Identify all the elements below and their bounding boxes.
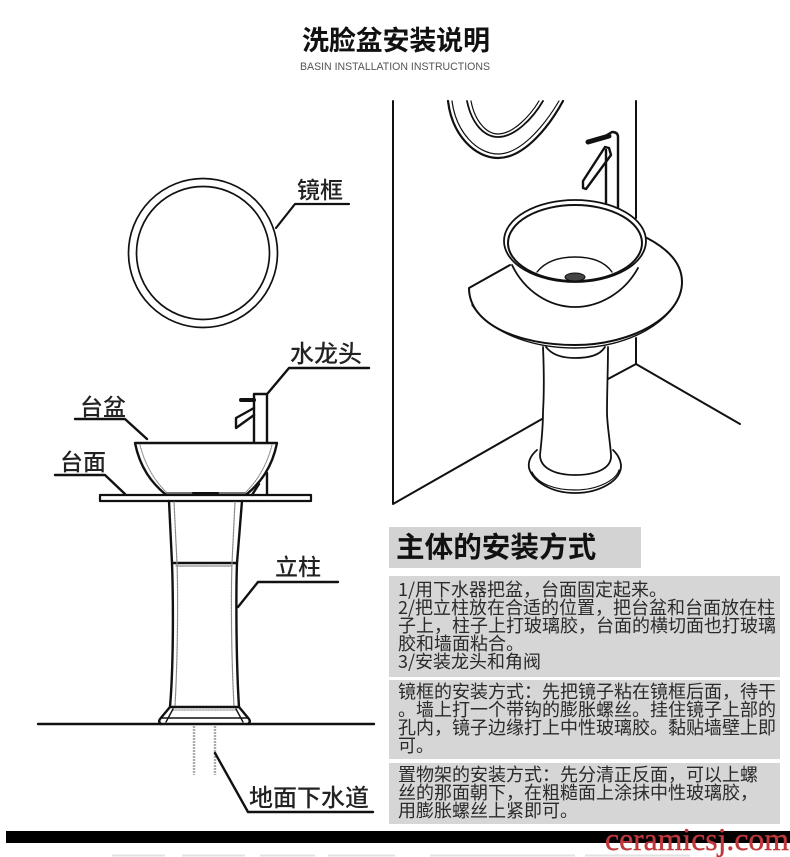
panel: mirror frame installation (389, 678, 780, 759)
mirror (448, 101, 563, 158)
drain pipes (194, 726, 215, 775)
counter top (100, 495, 311, 501)
faucet (236, 394, 267, 495)
panel: shelf installation: 丝的那面朝下，在粗糙面上涂抹中性玻璃胶， (398, 779, 758, 805)
callout: mirror frame label: 镜框 (297, 171, 343, 205)
basin bowl (504, 200, 646, 307)
pedestal column (529, 347, 621, 493)
panel: main installation steps: 子上，柱子上打玻璃胶，台面的横切面也打玻璃 (398, 612, 776, 638)
callout: basin label: 台盆 (80, 388, 126, 422)
counter top (469, 238, 682, 348)
callout: column label: 立柱 (275, 548, 321, 582)
panel: shelf installation (389, 761, 780, 824)
callout: floor drain label (215, 753, 373, 813)
callout: basin label (75, 388, 147, 439)
title: BASIN INSTALLATION INSTRUCTIONS (300, 61, 490, 73)
panel: mirror frame installation: 镜框的安装方式：先把镜子粘在镜框后面，待干 (398, 678, 776, 704)
panel: mirror frame installation: 可。 (398, 732, 434, 758)
faucet (583, 132, 618, 208)
walls and floor (393, 101, 740, 504)
ground line (38, 723, 374, 725)
diagram: perspective view of basin (393, 101, 740, 504)
title: 洗脸盆安装说明 (302, 19, 490, 58)
panel: heading: 主体的安装方式 (396, 525, 596, 566)
callout: mirror frame label (276, 171, 349, 228)
watermark: ceramicsj.com (605, 822, 789, 857)
diagram: side elevation of basin (38, 394, 374, 775)
panel: shelf installation: 用膨胀螺丝上紧即可。 (398, 797, 578, 823)
panel: main installation steps: 3/安装龙头和角阀 (398, 648, 541, 674)
callout: floor drain label: 地面下水道 (249, 778, 369, 813)
footer bar (6, 831, 790, 843)
panel: mirror frame installation: 孔内，镜子边缘打上中性玻璃胶。黏贴墙壁上即 (398, 714, 776, 740)
panel: main installation steps (389, 576, 780, 677)
panel: main installation steps: 2/把立柱放在合适的位置，把台盆和台面放在柱 (398, 594, 775, 620)
callout: counter label: 台面 (60, 443, 106, 477)
callout: faucet label (268, 334, 369, 393)
panel: mirror frame installation: 。墙上打一个带钩的膨胀螺丝。挂住镜子上部的 (398, 696, 776, 722)
icon: mirror frame (128, 178, 278, 328)
callout: faucet label: 水龙头 (290, 334, 362, 369)
pedestal column (159, 501, 250, 724)
panel: main installation steps: 胶和墙面粘合。 (398, 630, 524, 656)
panel: main installation steps: 1/用下水器把盆，台面固定起来。 (398, 576, 667, 602)
basin bowl (135, 443, 277, 494)
callout: counter label (55, 443, 125, 494)
panel: shelf installation: 置物架的安装方式：先分清正反面，可以上螺 (398, 761, 758, 787)
callout: column label (238, 548, 338, 607)
